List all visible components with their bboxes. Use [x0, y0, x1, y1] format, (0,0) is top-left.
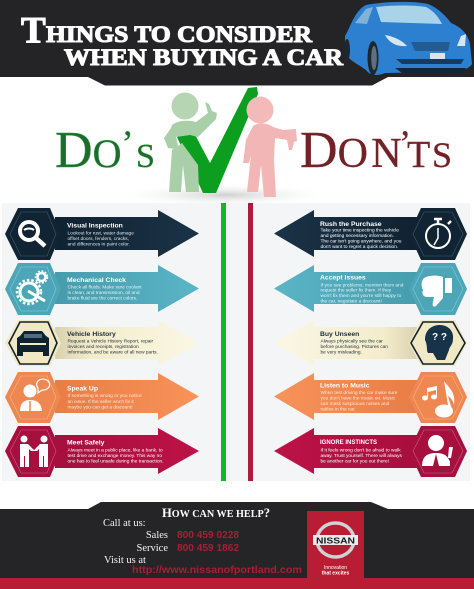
panel: Rush the Purchase	[274, 208, 467, 260]
text: Rush the Purchase: and getting necessary information.	[320, 233, 394, 239]
text: phone numbers and URL: 800 459 1862	[177, 543, 239, 554]
text: Rush the Purchase: don't want to regret a quick decision.	[320, 244, 398, 250]
text: Visual Inspection: Visual Inspection	[67, 222, 123, 230]
text: Accept Issues: won't fix them and you're still happy to	[320, 293, 402, 299]
icon: car front	[17, 331, 49, 356]
text: Mechanical Check: is clean, and transmission, oil and	[68, 290, 140, 296]
text: Mechanical Check: brake fluid are the correct colors.	[68, 296, 137, 302]
text: Listen to Music: When test driving the car make sure	[320, 390, 398, 396]
footer red strip	[0, 578, 474, 589]
text: Speak Up: If something is wrong or you notice	[68, 393, 142, 399]
text: contact labels: Sales	[146, 530, 168, 541]
title: HINGS TO CONSIDER	[46, 22, 313, 48]
text: Meet Safely: Meet Safely	[67, 440, 105, 446]
text: Buy Unseen: Buy Unseen	[320, 331, 359, 338]
heading: Do's: DO	[55, 122, 121, 179]
text: Visual Inspection: and differences in paint color.	[68, 242, 130, 248]
text: Buy Unseen	[320, 331, 388, 356]
shadow under figures	[115, 183, 335, 207]
icon: person with speech bubble	[20, 379, 50, 411]
footer band	[0, 502, 474, 579]
icon: music notes	[422, 381, 454, 418]
heading: Do's: ’	[121, 123, 133, 163]
icon: blue car	[344, 2, 472, 75]
text: Listen to Music: can mask suspicious noises and	[320, 401, 390, 407]
panel: Nissan logo: NISSAN	[316, 536, 355, 545]
panel: Ignore Instincts	[274, 426, 467, 477]
text: Listen to Music: Listen to Music	[320, 382, 370, 390]
text: Vehicle History: invoices and receipts, registration	[68, 344, 139, 350]
icon: person with exclamation mark	[422, 435, 453, 466]
title: T	[21, 10, 46, 52]
text: phone numbers and URL: http://www.nissanofportland.com	[132, 565, 302, 576]
panel: Nissan logo: that excites	[322, 570, 349, 576]
text: Buy Unseen: before purchasing. Pictures can	[320, 344, 388, 350]
text: contact labels: Call at us:	[103, 518, 146, 529]
text: Listen to Music: you don't have the music on. Music	[320, 396, 396, 402]
text: Meet Safely: test drive and exchange money. This way no	[68, 453, 162, 459]
panel: content background	[2, 203, 470, 481]
heading: Don'ts: DON	[300, 122, 402, 179]
text: Meet Safely: one has to feel unsafe during the transaction.	[68, 458, 164, 464]
title: WHEN BUYING A CAR	[64, 45, 344, 71]
icon: head with question marks: ? ?	[432, 332, 447, 343]
text: Meet Safely	[67, 440, 164, 464]
text: Vehicle History	[67, 331, 158, 356]
text: Vehicle History: Vehicle History	[67, 331, 116, 338]
icon: stopwatch	[426, 219, 451, 248]
text: Ignore Instincts: be another car for you out there!	[320, 458, 389, 464]
text: Accept Issues: request the seller fix them. If they	[320, 288, 392, 294]
icon: green check mark	[177, 87, 258, 193]
text: Ignore Instincts	[320, 439, 402, 464]
divider: red don'ts line	[248, 203, 253, 481]
text: Mechanical Check	[67, 277, 142, 302]
panel: Nissan logo	[307, 511, 364, 578]
title	[21, 10, 344, 71]
icon: gears and wrench	[17, 271, 48, 304]
text: Buy Unseen: be very misleading.	[320, 350, 362, 356]
panel: Accept Issues	[274, 263, 467, 315]
text: Visual Inspection: offset doors, fenders, cracks,	[68, 236, 129, 242]
text: Listen to Music	[320, 382, 398, 412]
text: Ignore Instincts: If it feels wrong don't be afraid to walk	[320, 448, 401, 454]
panel: Nissan logo: Innovation	[324, 565, 347, 571]
text: Speak Up	[67, 386, 142, 410]
text: Rush the Purchase: The car isn't going anywhere, and you	[320, 238, 402, 244]
panel: Visual Inspection	[5, 208, 199, 260]
text: Meet Safely: Always meet in a public place, like a bank, to	[68, 448, 163, 454]
heading: How can we help?: HOW CAN WE HELP?	[162, 505, 270, 520]
figure: pink man thumbs down	[243, 96, 297, 197]
heading: Don'ts: ’	[399, 123, 411, 163]
text: contact labels: Visit us at	[104, 555, 146, 566]
text: Rush the Purchase: Rush the Purchase	[320, 221, 382, 228]
text: phone numbers and URL	[132, 530, 302, 576]
divider: green do's line	[221, 203, 226, 481]
text: phone numbers and URL: 800 459 0228	[177, 530, 239, 541]
icon: head with question marks	[425, 325, 453, 360]
text: Visual Inspection	[67, 222, 134, 248]
panel: Buy Unseen	[274, 320, 467, 366]
text: contact labels	[103, 518, 168, 566]
heading: Don'ts: S	[432, 135, 452, 175]
text: Accept Issues: the car, negotiate a discount!	[320, 298, 382, 304]
text: Vehicle History: information, and be aware of all new parts.	[68, 350, 158, 356]
panel: Listen to Music	[274, 372, 467, 423]
text: Accept Issues: Accept Issues	[320, 274, 366, 282]
text: Mechanical Check: Check all fluids. Make sure coolant	[68, 284, 142, 290]
text: Vehicle History: Request a Vehicle History Report, repair	[68, 338, 153, 344]
text: Rush the Purchase	[320, 221, 402, 250]
icon: thumbs down	[422, 276, 452, 307]
text: Buy Unseen: Always physically see the car	[320, 338, 383, 344]
text: Mechanical Check: Mechanical Check	[67, 277, 126, 284]
icon: magnifier	[20, 222, 45, 246]
panel: Speak Up	[5, 372, 199, 423]
text: Ignore Instincts: IGNORE INSTINCTS	[320, 439, 377, 446]
header band	[0, 0, 474, 86]
heading: Don'ts: T	[407, 134, 430, 176]
text: Visual Inspection: Lookout for rust, water damage	[68, 230, 134, 236]
text: Speak Up: maybe you can get a discount!	[68, 404, 133, 410]
text: Rush the Purchase: Take your time inspecting the vehicle	[320, 228, 399, 234]
text: Speak Up: an issue. If the seller won't fix it	[68, 399, 134, 405]
text: Speak Up: Speak Up	[67, 386, 98, 392]
text: Accept Issues: If you see problems, mention them and	[320, 282, 404, 288]
text: contact labels: Service	[136, 543, 168, 554]
text: Accept Issues	[320, 274, 404, 304]
panel: Meet Safely	[5, 426, 199, 477]
heading: Do's: S	[136, 138, 155, 175]
text: Listen to Music: rattles in the car.	[320, 406, 356, 412]
panel: Mechanical Check	[5, 263, 199, 315]
icon: handshake	[20, 436, 48, 467]
text: Ignore Instincts: away. Trust yourself. There will always	[320, 453, 402, 459]
panel: Vehicle History	[5, 320, 199, 366]
figure: green man thumbs up	[164, 92, 217, 192]
